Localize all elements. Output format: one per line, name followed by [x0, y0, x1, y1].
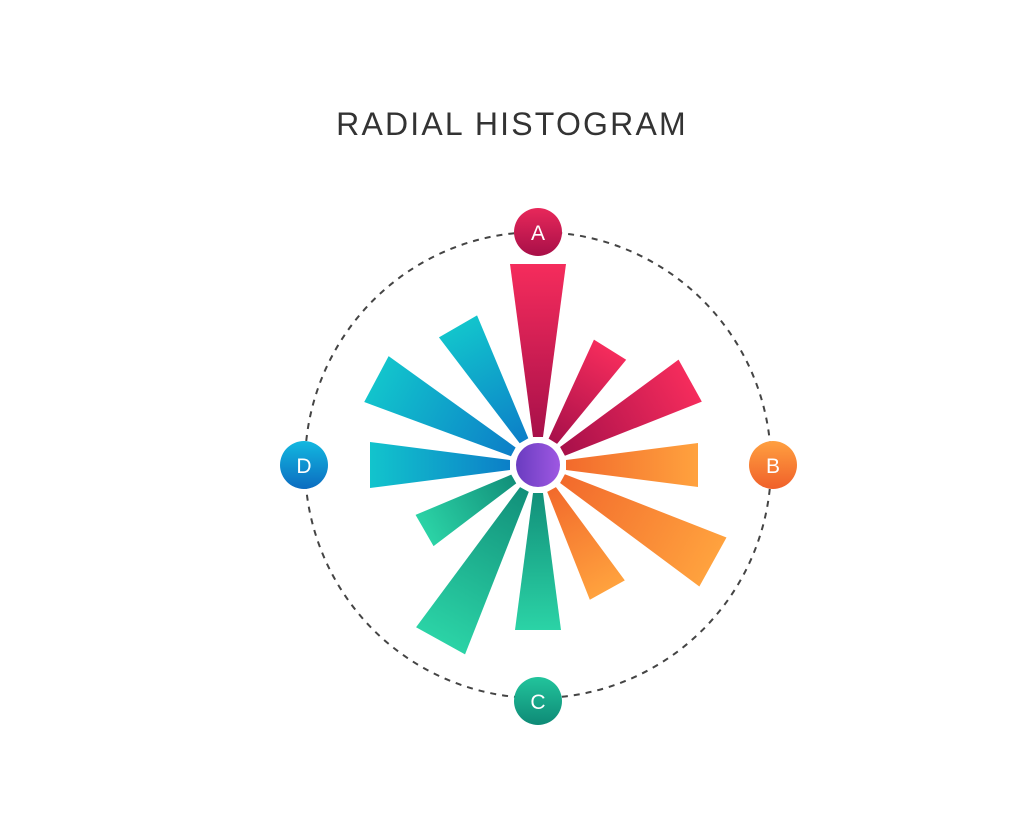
label B: B — [766, 455, 780, 478]
label C — [514, 677, 562, 725]
label B — [749, 441, 797, 489]
bars — [364, 264, 726, 654]
label D — [280, 441, 328, 489]
label D: D — [296, 455, 312, 478]
center hub — [512, 439, 564, 491]
label A: A — [531, 222, 545, 245]
dashed ring — [305, 232, 771, 698]
title: RADIAL HISTOGRAM — [336, 106, 688, 142]
label A — [514, 208, 562, 256]
label C: C — [530, 691, 546, 714]
